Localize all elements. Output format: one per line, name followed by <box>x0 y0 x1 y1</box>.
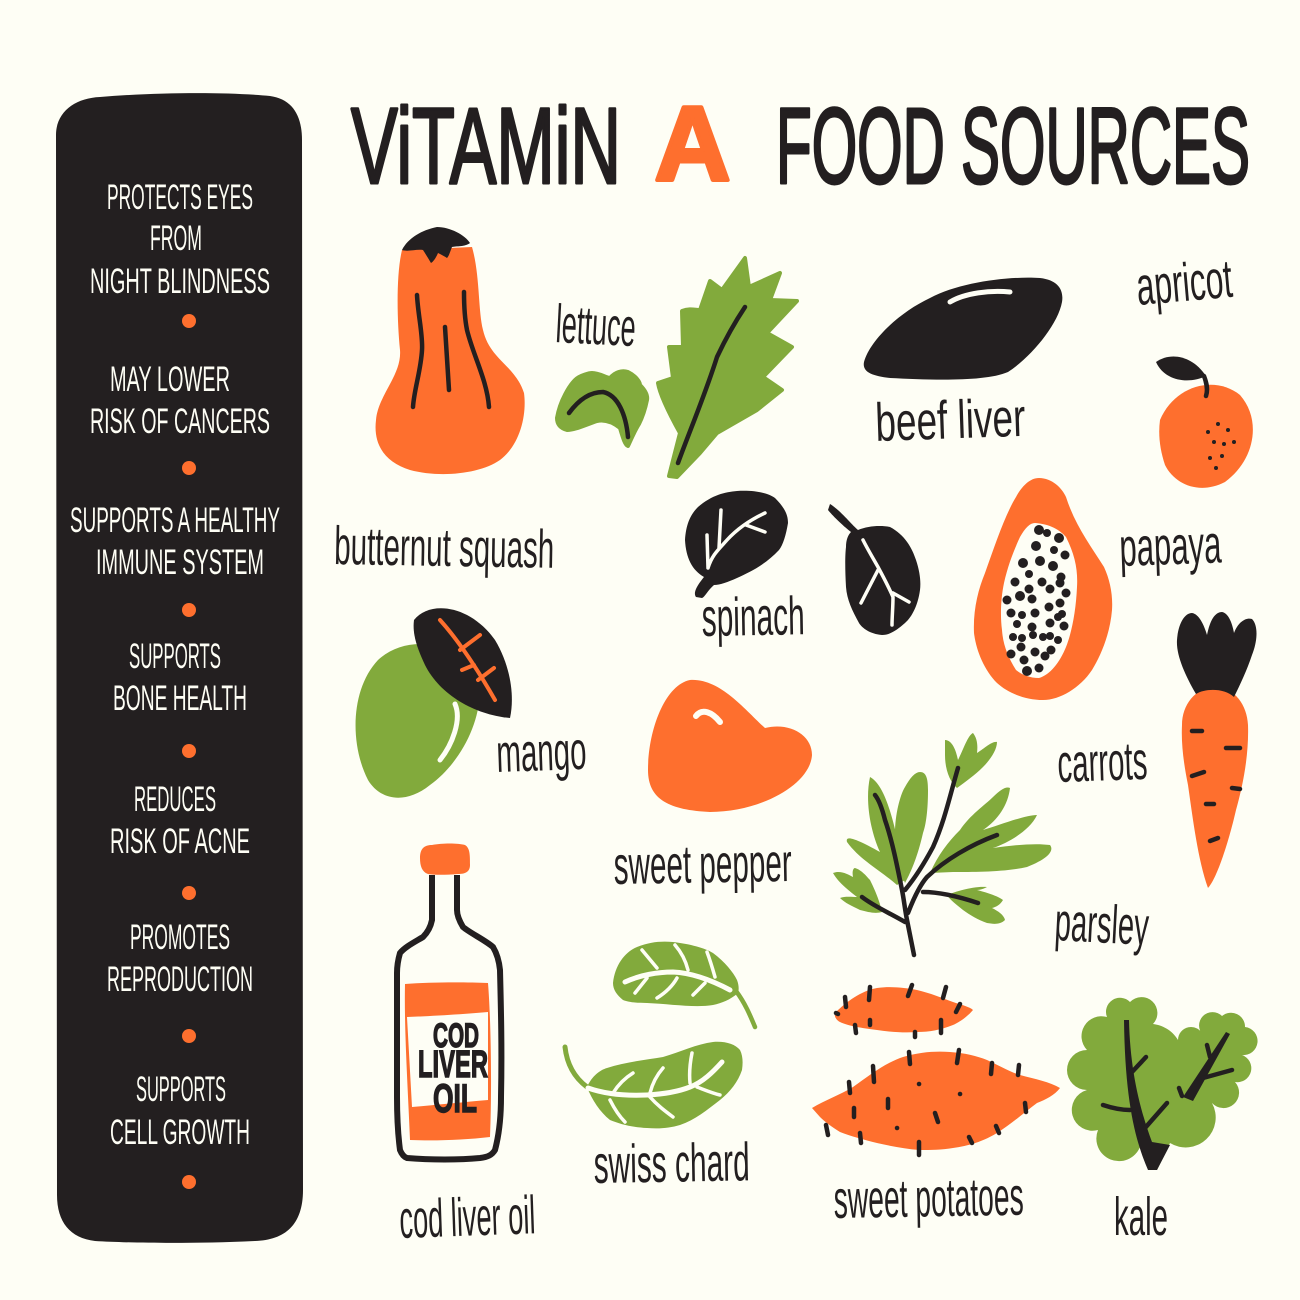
benefit: bone: SUPPORTS <box>129 637 221 676</box>
butternut squash <box>376 227 525 474</box>
cod liver oil bottle <box>397 844 501 1160</box>
sweet potatoes <box>812 985 1060 1155</box>
label: swiss chard: swiss chard <box>593 1132 750 1195</box>
kale <box>1067 997 1258 1170</box>
title: ViTAMiN <box>351 85 621 206</box>
label: kale: kale <box>1114 1187 1168 1247</box>
label: spinach: spinach <box>701 586 805 648</box>
benefit: cancers <box>90 360 270 441</box>
label: beef liver: beef liver <box>874 388 1026 453</box>
benefit: reproduction: PROMOTES <box>130 918 230 957</box>
benefit: eyes: FROM <box>150 219 202 258</box>
lettuce <box>557 258 797 477</box>
benefit: growth: CELL GROWTH <box>110 1113 250 1152</box>
bullet dots <box>182 314 196 1189</box>
benefit: eyes <box>90 178 270 301</box>
bottle label text: COD <box>433 1017 479 1055</box>
benefit: bone: BONE HEALTH <box>113 679 247 718</box>
panel: benefits <box>56 93 303 1243</box>
label: sweet pepper: sweet pepper <box>613 833 792 896</box>
bottle label text: LIVER <box>418 1044 488 1086</box>
label: apricot: apricot <box>1134 249 1235 317</box>
parsley <box>833 733 1051 955</box>
label: parsley: parsley <box>1053 892 1150 957</box>
benefit: acne: REDUCES <box>134 780 216 819</box>
benefit: eyes: NIGHT BLINDNESS <box>90 262 270 301</box>
papaya <box>974 478 1112 700</box>
apricot <box>1156 356 1253 488</box>
letter A: A <box>654 85 730 203</box>
benefit: immune: SUPPORTS A HEALTHY <box>70 501 280 540</box>
mango <box>356 608 512 798</box>
label: cod liver oil: cod liver oil <box>398 1185 536 1250</box>
benefit: growth: SUPPORTS <box>136 1070 226 1109</box>
label: sweet potatoes: sweet potatoes <box>833 1167 1024 1230</box>
label: lettuce: lettuce <box>554 294 637 358</box>
benefit: reproduction <box>107 918 253 999</box>
benefit: immune: IMMUNE SYSTEM <box>96 543 264 582</box>
spinach <box>685 491 920 635</box>
benefit: cancers: MAY LOWER <box>110 360 230 399</box>
beef liver <box>864 278 1062 380</box>
benefit: cancers: RISK OF CANCERS <box>90 402 270 441</box>
benefit: acne <box>110 780 250 861</box>
title <box>351 85 1250 206</box>
label: papaya: papaya <box>1118 514 1223 578</box>
benefit: reproduction: REPRODUCTION <box>107 960 253 999</box>
bottle label text <box>418 1017 488 1121</box>
benefit: growth <box>110 1070 250 1152</box>
benefit: acne: RISK OF ACNE <box>110 822 250 861</box>
label: mango: mango <box>495 721 587 784</box>
label: butternut squash: butternut squash <box>334 516 555 580</box>
benefit: immune <box>70 501 280 582</box>
carrot <box>1177 612 1256 888</box>
label: carrots: carrots <box>1056 731 1148 794</box>
benefit: bone <box>113 637 247 718</box>
benefit: eyes: PROTECTS EYES <box>107 178 253 217</box>
swiss chard <box>565 942 755 1128</box>
bottle label text: OIL <box>433 1077 477 1121</box>
sweet pepper <box>648 680 812 812</box>
